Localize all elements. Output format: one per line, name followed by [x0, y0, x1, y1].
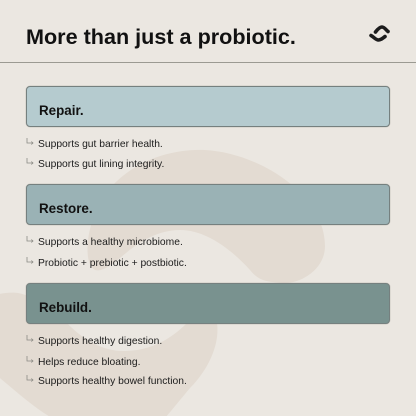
header divider — [0, 62, 416, 63]
text: probiotic prebiotic postbiotic: Probiotic + prebiotic + postbiotic. — [38, 258, 187, 269]
panel: repair — [26, 86, 390, 127]
heading: rebuild: Rebuild. — [39, 300, 92, 315]
text: supports healthy digestion: Supports healthy digestion. — [38, 336, 162, 347]
text: supports a healthy microbiome: Supports a healthy microbiome. — [38, 237, 183, 248]
panel: rebuild — [26, 283, 390, 324]
icon: logo — [369, 25, 390, 42]
text: supports healthy bowel function: Supports healthy bowel function. — [38, 376, 187, 387]
panel: restore — [26, 184, 390, 225]
text: supports gut barrier health: Supports gut barrier health. — [38, 139, 163, 150]
text: helps reduce bloating: Helps reduce bloating. — [38, 357, 140, 368]
heading: repair: Repair. — [39, 103, 84, 118]
heading: restore: Restore. — [39, 201, 93, 216]
title: More than just a probiotic. — [26, 24, 296, 49]
text: supports gut lining integrity: Supports gut lining integrity. — [38, 159, 164, 170]
